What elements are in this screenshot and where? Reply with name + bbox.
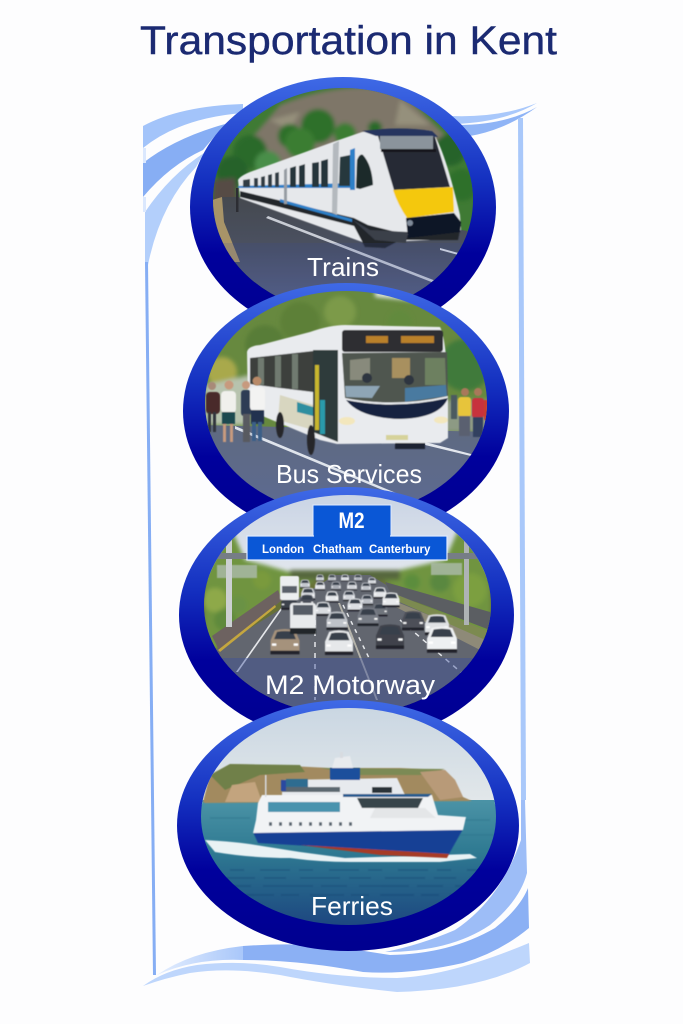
bus — [247, 325, 448, 455]
circle frame: trains — [190, 77, 496, 337]
safety fence — [385, 582, 490, 630]
circle frame: ferries — [177, 700, 519, 951]
ribbon: bottom band lightest — [143, 943, 530, 992]
people left — [206, 376, 265, 442]
panel: trains — [190, 77, 496, 309]
train yellow nose — [393, 187, 454, 218]
wake — [205, 840, 477, 862]
photo: ferry at sea — [198, 705, 500, 928]
traffic — [217, 563, 462, 655]
ribbon: left edge line — [145, 262, 156, 975]
headland — [203, 764, 472, 803]
ferry hull — [253, 829, 463, 854]
text shade — [222, 658, 473, 706]
verge — [212, 590, 282, 652]
panel: M2 motorway — [179, 487, 514, 743]
lane markings — [236, 605, 285, 672]
bus front panel — [346, 398, 448, 419]
sign text: destinations: London — [262, 544, 304, 556]
ribbon: bottom band dark — [243, 888, 529, 973]
sign text: destinations: Canterbury — [369, 544, 431, 556]
title: Transportation in Kent — [140, 19, 557, 63]
text shade — [223, 243, 462, 282]
right pavement — [396, 603, 484, 650]
white van — [290, 603, 316, 633]
people right — [451, 388, 489, 437]
road surface — [216, 575, 482, 707]
photo: train on tracks — [213, 88, 473, 296]
ferry white decks — [253, 795, 466, 833]
ferry window band — [268, 802, 340, 812]
ferry — [253, 752, 466, 858]
road surface — [222, 197, 468, 296]
sky gap — [372, 293, 411, 304]
road surface — [208, 425, 482, 500]
label: Trains: Trains — [307, 252, 379, 282]
bus windscreen — [342, 352, 448, 403]
label: Ferries: Ferries — [311, 891, 393, 921]
ferry portholes — [269, 822, 352, 826]
train — [238, 128, 461, 248]
bus destination sign — [342, 330, 443, 352]
pedestrian — [236, 188, 238, 212]
platform kerb — [212, 197, 240, 262]
ferry bridge windows — [357, 798, 423, 808]
road lines — [235, 426, 396, 493]
banner ribbon frame — [143, 103, 537, 992]
gantry poles — [226, 535, 232, 627]
ferry upper deck — [286, 779, 308, 787]
white truck — [280, 576, 299, 600]
sign text: destinations: Chatham — [313, 544, 362, 556]
motorway sign — [247, 505, 447, 560]
photo: motorway traffic — [204, 495, 491, 707]
train side door window — [356, 155, 373, 189]
ribbon: top left bands — [143, 104, 243, 265]
ribbon: lower right light band — [385, 800, 527, 952]
road line — [266, 216, 436, 283]
circle frame: motorway — [179, 487, 514, 743]
panel: bus services — [183, 283, 509, 512]
photo: bus with passengers — [205, 291, 487, 500]
circle frame: bus — [183, 283, 509, 539]
ribbon: right edge line — [518, 118, 526, 800]
sign text: M2: M2 — [338, 508, 364, 533]
label: M2 Motorway: M2 Motorway — [265, 670, 436, 700]
ribbon: top right bands — [450, 103, 537, 136]
label: Bus Services: Bus Services — [276, 459, 422, 489]
ribbon: bottom left fading band — [157, 946, 243, 975]
train windscreen — [378, 136, 450, 190]
sea waves — [210, 818, 495, 895]
panel: ferries — [177, 700, 519, 951]
roadside signs — [217, 565, 257, 578]
